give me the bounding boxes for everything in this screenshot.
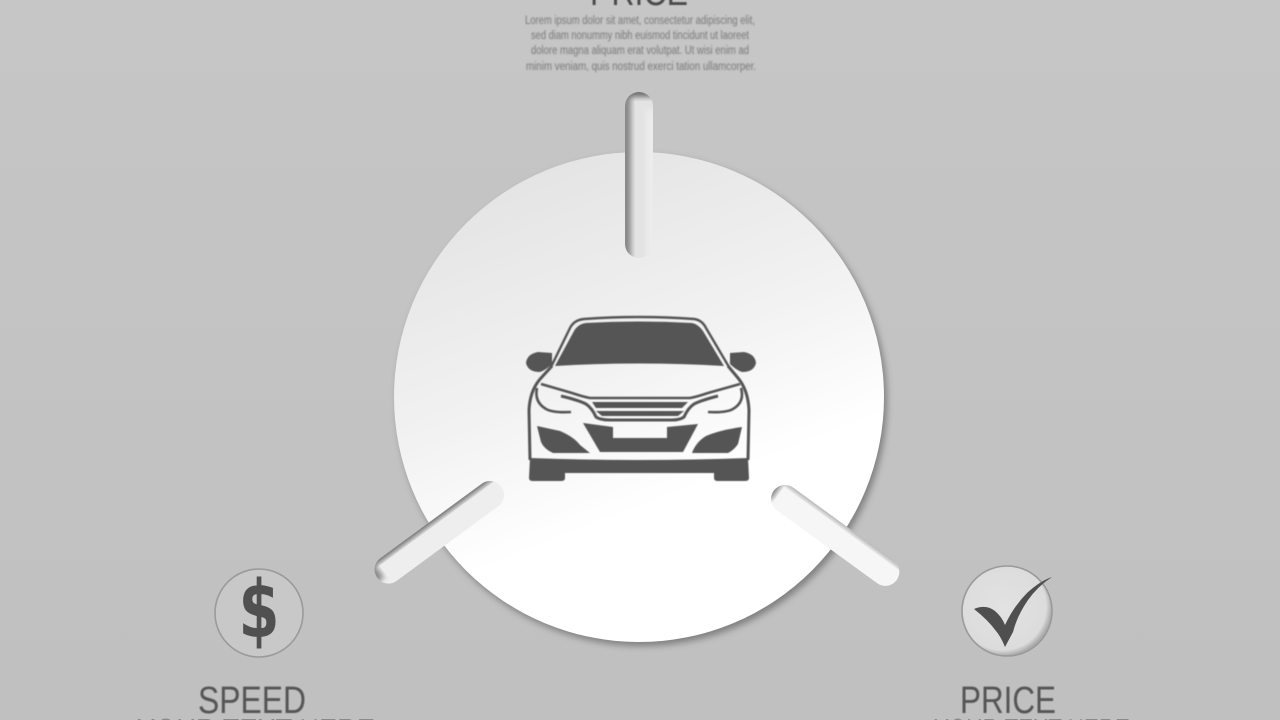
car lower intakes bbox=[537, 423, 742, 453]
icon: dollar badge bbox=[215, 564, 303, 657]
car grille bbox=[592, 402, 688, 416]
car hood line and headlights bbox=[536, 384, 742, 420]
icon: dollar badge: $ bbox=[238, 564, 280, 656]
infographic canvas bbox=[138, 0, 1128, 720]
car mirrors bbox=[526, 352, 756, 372]
lower-right slot bbox=[771, 485, 900, 586]
car body outline bbox=[529, 366, 749, 460]
icon: check badge bbox=[962, 566, 1052, 656]
central white disc bbox=[394, 152, 887, 646]
top description text: dolore magna aliquam erat volutpat. Ut wisi enim ad bbox=[531, 45, 749, 57]
car roof outline bbox=[551, 317, 729, 367]
top description text bbox=[525, 15, 756, 73]
top description text: sed diam nonummy nibh euismod tincidunt ut laoreet bbox=[531, 30, 750, 42]
top description text: Lorem ipsum dolor sit amet, consectetur adipiscing elit, bbox=[525, 15, 755, 27]
top slot bbox=[625, 92, 653, 258]
car bumper and wheels bbox=[529, 458, 749, 481]
car windshield bbox=[555, 322, 724, 366]
top description text: minim veniam, quis nostrud exerci tation ullamcorper. bbox=[526, 61, 756, 73]
lower-left slot bbox=[374, 481, 504, 584]
icon: car front bbox=[526, 317, 756, 481]
